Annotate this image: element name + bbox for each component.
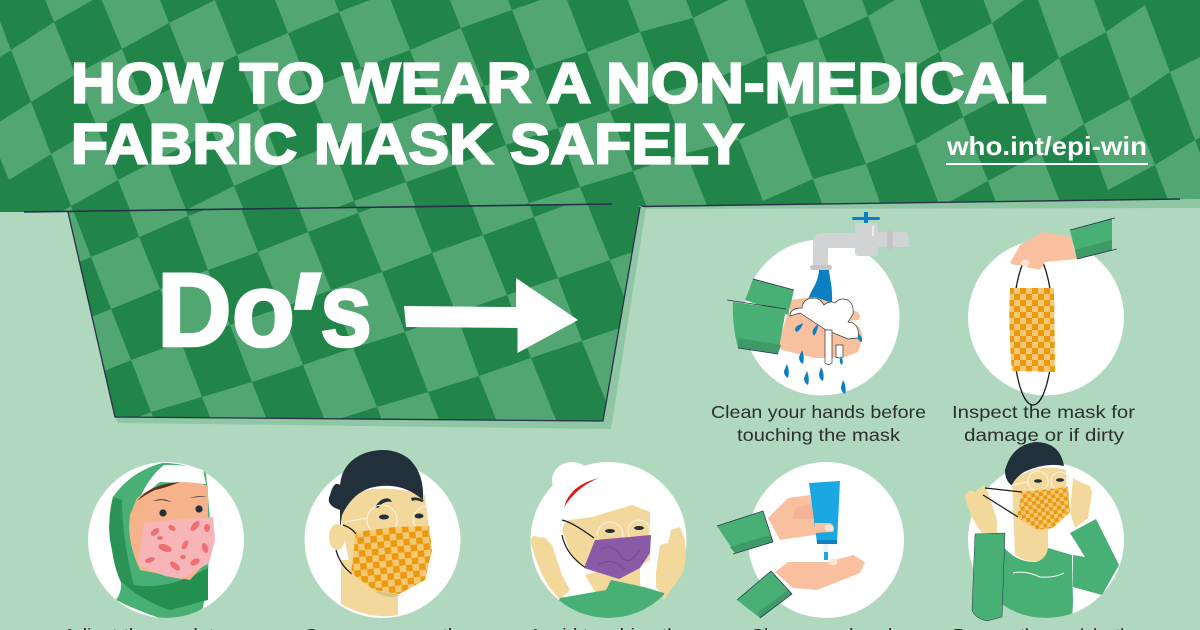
panel: clean hands	[711, 212, 926, 445]
face	[342, 489, 429, 590]
panel: avoid touching	[529, 462, 689, 630]
ear	[329, 524, 345, 550]
panel: remove mask	[953, 442, 1139, 630]
title: HOW TO WEAR A NON-MEDICAL	[71, 52, 1047, 116]
glasses	[1012, 471, 1069, 491]
sleeves	[745, 279, 794, 315]
straps	[983, 488, 1022, 517]
mask	[1009, 288, 1055, 372]
heading: Do's: '	[265, 245, 334, 401]
panel: inspect mask	[952, 218, 1135, 445]
right arm	[1070, 519, 1119, 595]
water stream	[807, 270, 832, 303]
heading: Do's: s	[320, 252, 372, 369]
strap	[336, 525, 356, 574]
glasses	[345, 505, 429, 535]
website link: who.int/epi-win	[946, 131, 1147, 161]
neck	[585, 560, 640, 600]
hand shade	[792, 503, 816, 519]
shirt wrinkle	[1013, 572, 1064, 577]
arrow	[404, 278, 578, 353]
panel: adjust mask	[68, 462, 244, 630]
shirt	[1000, 545, 1073, 620]
caption: Clean your hands before	[711, 402, 926, 422]
panel: Do's	[24, 203, 641, 422]
hands	[531, 536, 570, 600]
header shadow band	[640, 199, 1200, 209]
mask	[584, 535, 651, 579]
header bottom line right	[640, 199, 1180, 206]
upper hand	[768, 495, 834, 540]
eyes and brows	[375, 497, 424, 520]
foam	[790, 298, 858, 339]
mask straps	[1013, 253, 1053, 405]
icon: faucet	[810, 212, 910, 270]
front hand	[778, 312, 862, 358]
hand	[1010, 232, 1077, 270]
title	[71, 52, 1047, 176]
water drops	[784, 323, 862, 394]
head cloth	[140, 465, 206, 498]
mask	[351, 526, 432, 594]
shirt	[559, 580, 664, 618]
header checkered band	[0, 0, 1200, 212]
lower hand	[775, 555, 865, 590]
panel: inspect mask: damage or if dirty	[964, 425, 1124, 445]
hijab	[109, 463, 210, 620]
left arm	[972, 533, 1005, 621]
heading: Do's: Do	[157, 252, 295, 369]
eyes and glasses	[597, 520, 650, 548]
sleeve	[1070, 218, 1112, 259]
panel shadow	[115, 206, 646, 429]
panel: cover mouth and nose	[304, 450, 464, 630]
mask	[1017, 487, 1070, 530]
neck	[341, 560, 398, 616]
hair bump	[552, 462, 592, 498]
tube	[809, 481, 840, 543]
hair	[137, 482, 180, 501]
heading: Do's	[157, 245, 372, 401]
strap	[562, 520, 594, 568]
headband	[564, 478, 599, 507]
caption: Inspect the mask for	[952, 402, 1135, 422]
hands	[965, 485, 997, 533]
panel: clean hands before removal	[717, 462, 904, 630]
sleeves	[717, 511, 773, 553]
neck and face	[1012, 468, 1067, 562]
mask floral print	[144, 519, 210, 572]
hair	[1005, 442, 1064, 485]
back hand	[790, 297, 860, 322]
face	[562, 505, 650, 575]
title: FABRIC MASK SAFELY	[71, 112, 744, 176]
eyes	[153, 496, 207, 517]
thumb	[815, 523, 834, 533]
face	[129, 482, 208, 580]
mask	[138, 517, 215, 579]
hair	[329, 450, 423, 530]
panel: clean hands: touching the mask	[737, 425, 900, 445]
